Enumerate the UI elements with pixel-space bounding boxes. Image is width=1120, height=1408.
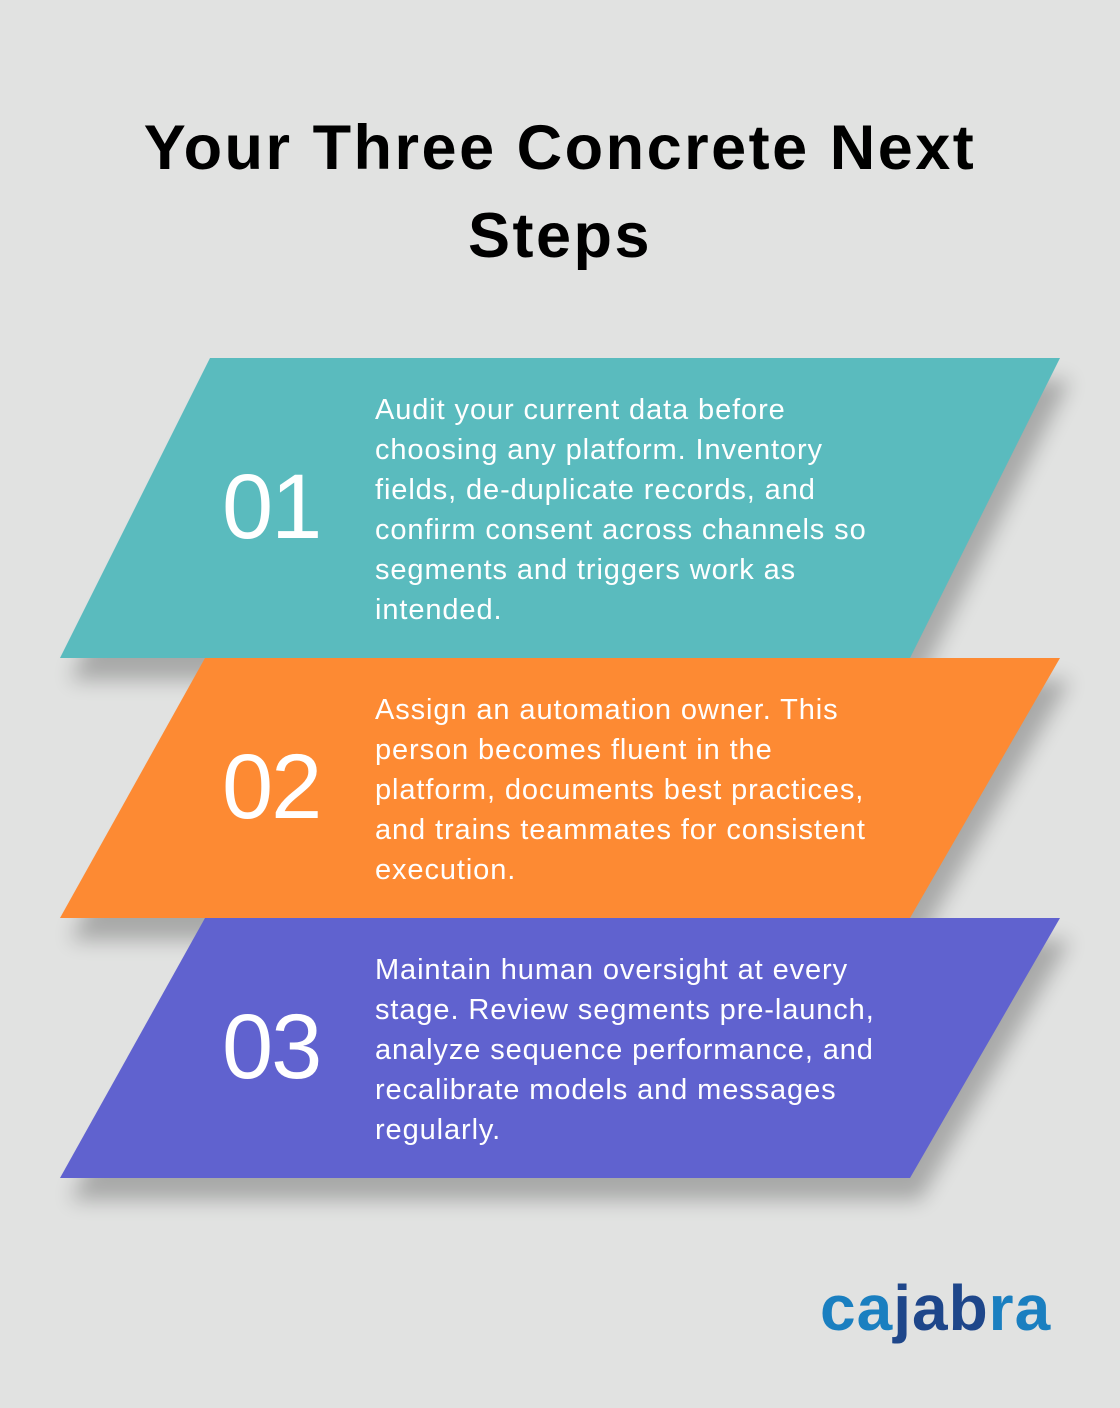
text 2: Assign an automation owner. This [375, 694, 839, 726]
title: Your Three Concrete Next [144, 113, 976, 183]
text 3: recalibrate models and messages [375, 1074, 837, 1106]
text 2: platform, documents best practices, [375, 774, 864, 806]
text 2: and trains teammates for consistent [375, 814, 866, 846]
text 1: Audit your current data before [375, 394, 786, 426]
text 2: person becomes fluent in the [375, 734, 773, 766]
logo: cajabra [820, 1272, 1051, 1344]
text 3 [375, 954, 875, 1146]
title [144, 113, 976, 271]
text 1 [375, 394, 867, 626]
text 3: Maintain human oversight at every [375, 954, 848, 986]
number 03: 03 [222, 996, 320, 1098]
text 2: execution. [375, 854, 516, 886]
number 01: 01 [222, 456, 320, 558]
text 3: analyze sequence performance, and [375, 1034, 874, 1066]
step 3 [222, 954, 875, 1146]
text 1: confirm consent across channels so [375, 514, 867, 546]
text 1: intended. [375, 594, 502, 626]
text 3: regularly. [375, 1114, 501, 1146]
text 2 [375, 694, 866, 886]
title: Steps [468, 201, 652, 271]
text 1: choosing any platform. Inventory [375, 434, 823, 466]
number 02: 02 [222, 736, 320, 838]
text 3: stage. Review segments pre-launch, [375, 994, 875, 1026]
text 1: fields, de-duplicate records, and [375, 474, 816, 506]
step 2 [222, 694, 866, 886]
step 1 [222, 394, 867, 626]
text 1: segments and triggers work as [375, 554, 796, 586]
